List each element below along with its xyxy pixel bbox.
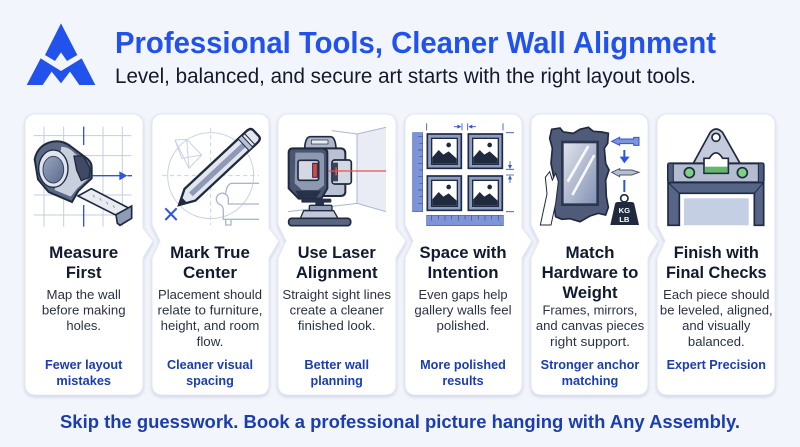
description	[158, 288, 262, 349]
description: create a cleaner	[290, 304, 384, 318]
description: right support.	[550, 335, 630, 349]
heading: Intention	[428, 264, 498, 282]
benefit	[304, 358, 369, 388]
description	[42, 288, 126, 333]
heading: Space with	[420, 244, 506, 262]
description: height, and room	[161, 319, 259, 333]
panel: finish with final checks	[657, 114, 775, 395]
benefit: matching	[562, 374, 618, 388]
icon: mirror, anchors and weight: LB	[619, 215, 630, 224]
benefit: Better wall	[304, 358, 369, 372]
heading: Match	[566, 244, 614, 262]
heading	[296, 244, 378, 282]
description: Straight sight lines	[282, 288, 391, 302]
description: flow.	[197, 335, 223, 349]
description: Each piece should	[663, 288, 769, 302]
benefit: More polished	[420, 358, 506, 372]
panel: mark true center	[152, 114, 279, 395]
heading: Use Laser	[298, 244, 376, 262]
icon: pencil and layout sketch	[162, 127, 261, 225]
icon: level on frame	[668, 129, 764, 225]
heading	[49, 244, 118, 282]
icon: mirror, anchors and weight: KG	[619, 206, 630, 215]
heading	[666, 244, 767, 282]
call to action: Skip the guesswork. Book a professional picture hanging with Any Assembly.	[60, 411, 740, 432]
description: gallery walls feel	[414, 304, 512, 318]
panel: space with intention	[405, 114, 532, 395]
description: before making	[42, 304, 126, 318]
benefit: results	[442, 374, 484, 388]
description	[660, 288, 773, 349]
heading	[420, 244, 506, 282]
benefit	[541, 358, 639, 388]
heading: Weight	[562, 284, 618, 302]
heading	[542, 244, 638, 302]
panel: use laser alignment	[278, 114, 406, 395]
description: polished.	[436, 319, 490, 333]
icon: tape measure	[34, 127, 132, 227]
heading: Hardware to	[542, 264, 638, 282]
subtitle: Level, balanced, and secure art starts with the right layout tools.	[115, 65, 696, 88]
description	[536, 304, 644, 349]
description: Map the wall	[47, 288, 121, 302]
benefit: Fewer layout	[45, 358, 123, 372]
heading: Alignment	[296, 264, 378, 282]
description: relate to furniture,	[158, 304, 262, 318]
heading	[170, 244, 250, 282]
heading: Measure	[49, 244, 118, 262]
icon: mirror, anchors and weight	[540, 127, 639, 225]
heading: First	[66, 264, 102, 282]
benefit: Stronger anchor	[541, 358, 639, 372]
benefit	[420, 358, 506, 388]
description: and canvas pieces	[536, 319, 644, 333]
benefit: spacing	[186, 374, 234, 388]
title: Professional Tools, Cleaner Wall Alignment	[115, 25, 716, 60]
icon: laser level	[288, 127, 386, 226]
description: and visually	[682, 319, 751, 333]
benefit	[167, 358, 253, 388]
heading: Mark True	[170, 244, 250, 262]
heading: Final Checks	[666, 264, 767, 282]
description: Placement should	[158, 288, 262, 302]
panel: measure first	[25, 114, 153, 395]
description: be leveled, aligned,	[660, 304, 773, 318]
description: finished look.	[298, 319, 376, 333]
panel: match hardware to weight	[531, 114, 658, 395]
description: Even gaps help	[418, 288, 508, 302]
description: holes.	[66, 319, 101, 333]
heading: Center	[183, 264, 238, 282]
heading: Finish with	[674, 244, 759, 262]
benefit: Cleaner visual	[167, 358, 253, 372]
benefit: planning	[311, 374, 363, 388]
logo	[27, 23, 95, 85]
description	[282, 288, 391, 333]
description: balanced.	[688, 335, 745, 349]
benefit: mistakes	[56, 374, 111, 388]
description: Frames, mirrors,	[542, 304, 638, 318]
icon: gallery wall with rulers	[413, 123, 514, 226]
benefit	[45, 358, 123, 388]
benefit: Expert Precision	[667, 358, 766, 372]
description	[414, 288, 512, 333]
